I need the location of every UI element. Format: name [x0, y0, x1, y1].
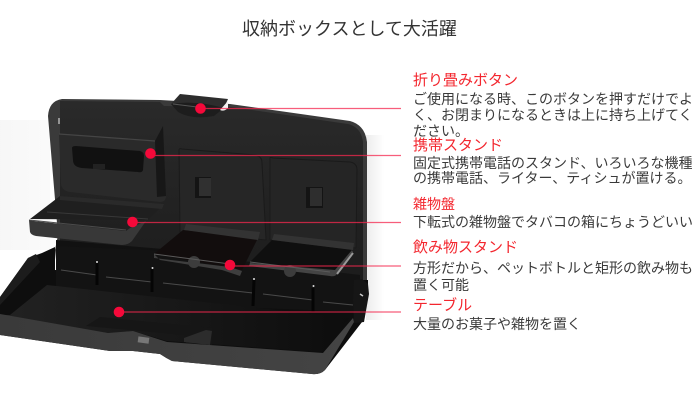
heading: fold button: 折り畳みボタン	[413, 72, 518, 89]
back panel	[48, 99, 367, 300]
callout dots	[114, 103, 235, 317]
heading: drink stand: 飲み物スタンド	[413, 239, 518, 256]
fold button	[171, 94, 228, 117]
text: fold button: ご使用になる時、このボタンを押すだけでよ	[413, 91, 693, 107]
text: fold button: く、お閉まりになるときは上に持ち上げてく	[413, 107, 693, 123]
callout lines	[119, 108, 401, 312]
phone holder recesses	[179, 149, 266, 240]
text: phone stand	[413, 155, 692, 186]
title: 収納ボックスとして大活躍	[242, 19, 457, 39]
small item tray	[29, 196, 180, 296]
drink stands	[154, 224, 354, 277]
text: drink stand	[413, 260, 693, 293]
text: item tray: 下転式の雑物盤でタバコの箱にちょうどいい	[413, 214, 693, 230]
heading: item tray: 雑物盤	[413, 196, 455, 212]
text: table: 大量のお菓子や雑物を置く	[413, 316, 581, 332]
storage pocket	[59, 118, 166, 202]
text: phone stand: 固定式携帯電話のスタンド、いろいろな機種	[413, 155, 692, 171]
table ribs	[61, 270, 353, 305]
table	[0, 246, 369, 374]
text: fold button	[413, 91, 693, 139]
text: fold button: ださい。	[413, 123, 469, 139]
hinge right	[353, 279, 369, 323]
text: drink stand: 置く可能	[413, 277, 469, 293]
text: phone stand: の携帯電話、ライター、ティシュが置ける。	[413, 170, 691, 186]
text: drink stand: 方形だから、ペットボトルと矩形の飲み物も	[413, 260, 693, 276]
heading: phone stand: 携帯スタンド	[413, 137, 503, 154]
heading: table: テーブル	[413, 297, 472, 314]
